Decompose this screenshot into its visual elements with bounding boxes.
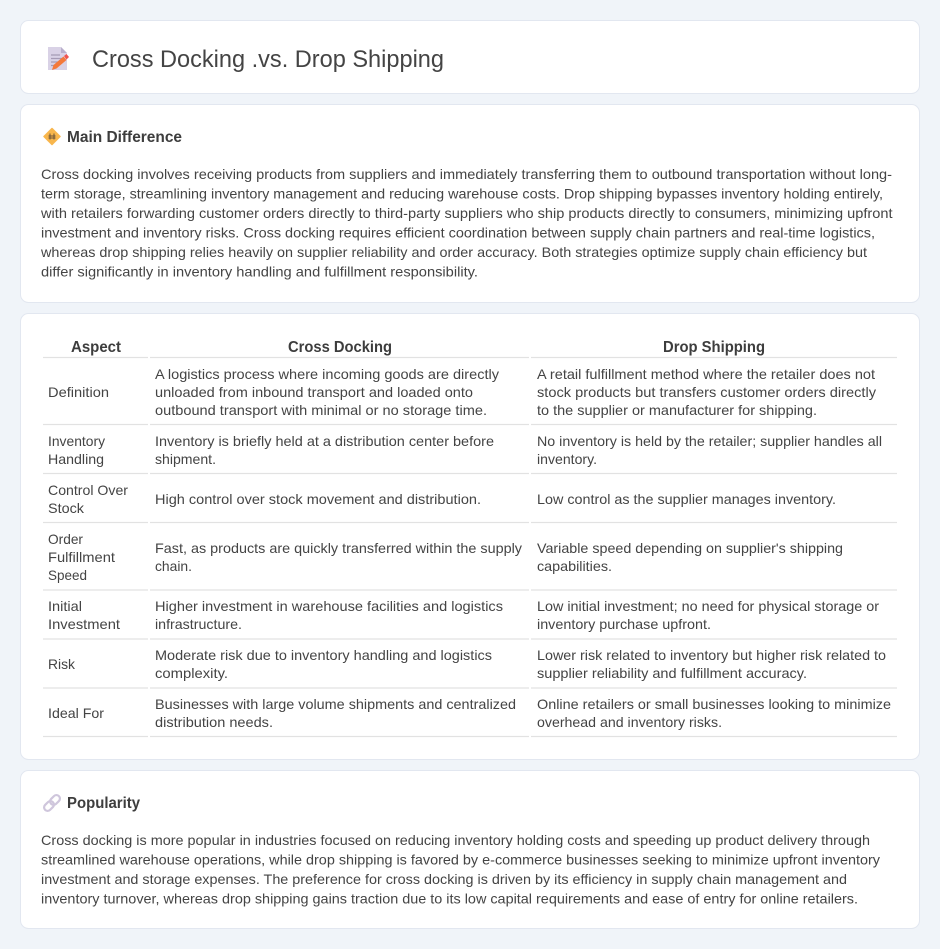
table header — [71, 339, 765, 356]
row: definition: Definition — [48, 384, 109, 400]
row: ideal for: Online retailers or small businesses looking to minimize — [537, 696, 891, 712]
heading: main difference: Main Difference — [67, 129, 182, 146]
row: risk: Moderate risk due to inventory handling and logistics — [155, 647, 492, 663]
row: initial investment: Higher investment in warehouse facilities and logistics — [155, 598, 503, 614]
row: definition: unloaded from inbound transport and loaded onto — [155, 384, 473, 400]
title: Cross Docking .vs. Drop Shipping — [92, 46, 444, 73]
row: inventory handling: shipment. — [155, 451, 216, 467]
row: initial investment: Low initial investment; no need for physical storage or — [537, 598, 879, 614]
row: inventory handling — [48, 433, 882, 467]
table header: Cross Docking — [288, 339, 392, 356]
row: order fulfillment speed: capabilities. — [537, 558, 612, 574]
text block: main difference paragraph: term storage, streamlining inventory management and reducing warehouse costs. Drop shipping bypasses inventory holding entirely, — [41, 186, 883, 202]
row: control over stock: Control Over — [48, 482, 128, 498]
table header: Drop Shipping — [663, 339, 765, 356]
text block: popularity paragraph: Cross docking is more popular in industries focused on reducing inventory holding costs and speeding up product delivery through — [41, 832, 870, 848]
row: control over stock: Stock — [48, 500, 85, 516]
row: order fulfillment speed: Order — [48, 531, 83, 547]
table rules — [43, 358, 897, 736]
heading: popularity: Popularity — [67, 795, 140, 812]
row: control over stock: High control over stock movement and distribution. — [155, 491, 481, 507]
row: definition: to the supplier or manufacturer for shipping. — [537, 402, 817, 418]
text block: main difference paragraph: differ significantly in inventory handling and fulfillment responsibility. — [41, 264, 478, 280]
row: definition — [48, 366, 876, 418]
row: initial investment: Initial — [48, 598, 82, 614]
row: order fulfillment speed: Fast, as products are quickly transferred within the supply — [155, 540, 522, 556]
row: definition: A logistics process where incoming goods are directly — [155, 366, 499, 382]
row: initial investment: inventory purchase upfront. — [537, 616, 711, 632]
icon: document with pencil — [48, 47, 69, 70]
row: control over stock: Low control as the supplier manages inventory. — [537, 491, 836, 507]
row: risk: complexity. — [155, 665, 228, 681]
row: inventory handling: Inventory is briefly held at a distribution center before — [155, 433, 494, 449]
row: order fulfillment speed: Variable speed depending on supplier's shipping — [537, 540, 843, 556]
row: inventory handling: inventory. — [537, 451, 597, 467]
row: definition: stock products but transfers customer orders directly — [537, 384, 876, 400]
text block: popularity paragraph — [41, 832, 880, 906]
icon: chain link — [43, 794, 61, 812]
row: definition: outbound transport with minimal or no storage time. — [155, 402, 487, 418]
row: initial investment — [48, 598, 879, 632]
row: ideal for: Ideal For — [48, 705, 104, 721]
row: risk: Risk — [48, 656, 76, 672]
row: initial investment: Investment — [48, 616, 120, 632]
text block: main difference paragraph: Cross docking involves receiving products from suppliers and immediately transferring them to outbound transportation without long- — [41, 166, 892, 182]
text block: popularity paragraph: investment and storage expenses. The preference for cross docking is driven by its efficiency in supply chain management and — [41, 871, 847, 887]
panel: main difference — [20, 104, 920, 302]
row: risk: Lower risk related to inventory but higher risk related to — [537, 647, 886, 663]
row: order fulfillment speed: Speed — [48, 567, 87, 583]
icon: warning diamond — [44, 128, 60, 144]
row: ideal for: overhead and inventory risks. — [537, 714, 722, 730]
text block: popularity paragraph: inventory turnover, whereas drop shipping gains traction due to its low capital requirements and ease of entry for online retailers. — [41, 890, 858, 906]
row: initial investment: infrastructure. — [155, 616, 242, 632]
row: ideal for — [48, 696, 891, 730]
row: risk — [48, 647, 886, 681]
row: ideal for: distribution needs. — [155, 714, 273, 730]
row: inventory handling: No inventory is held by the retailer; supplier handles all — [537, 433, 882, 449]
text block: main difference paragraph: investment and inventory risks. Cross docking requires efficient coordination between supply chain partners and real-time logistics, — [41, 225, 875, 241]
row: inventory handling: Inventory — [48, 433, 105, 449]
row: risk: supplier reliability and fulfillment accuracy. — [537, 665, 807, 681]
text block: main difference paragraph: with retailers forwarding customer orders directly to third-party suppliers who ship products directly to consumers, minimizing upfront — [40, 205, 893, 221]
row: order fulfillment speed: chain. — [155, 558, 192, 574]
text block: main difference paragraph — [40, 166, 893, 280]
row: order fulfillment speed: Fulfillment — [48, 549, 115, 565]
panel: popularity — [20, 770, 920, 928]
panel: title card — [20, 20, 920, 94]
table header: Aspect — [71, 339, 122, 356]
row: inventory handling: Handling — [48, 451, 104, 467]
row: definition: A retail fulfillment method where the retailer does not — [537, 366, 875, 382]
row: control over stock — [48, 482, 836, 516]
row: order fulfillment speed — [48, 531, 843, 583]
row: ideal for: Businesses with large volume shipments and centralized — [155, 696, 516, 712]
text block: main difference paragraph: whereas drop shipping relies heavily on supplier reliability and order accuracy. Both strategies optimize supply chain efficiency but — [40, 244, 867, 260]
text block: popularity paragraph: streamlined warehouse operations, while drop shipping is favored by e-commerce businesses seeking to minimize upfront inventory — [41, 852, 880, 868]
panel: comparison table — [20, 314, 920, 760]
